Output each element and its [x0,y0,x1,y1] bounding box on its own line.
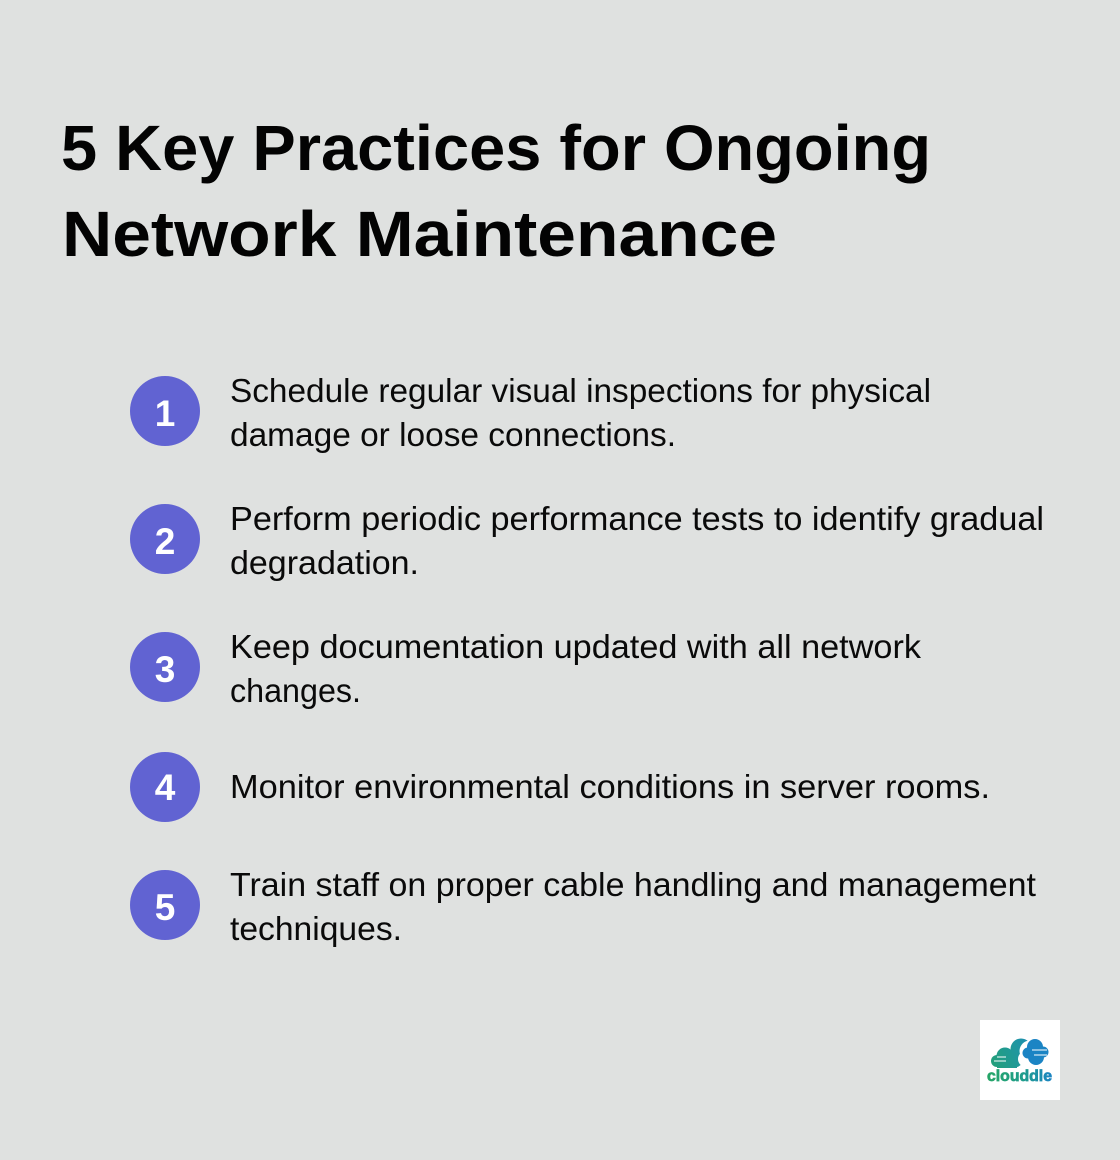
text 3: Keep documentation updated with all network [230,628,922,665]
text 3 [230,628,922,709]
list item 5 [130,866,1036,947]
list item 4 [130,752,990,822]
text 2: Perform periodic performance tests to identify gradual [230,500,1044,537]
badge 1: 1 [155,393,175,434]
text 5: Train staff on proper cable handling and management [230,866,1036,903]
badge 1 [130,376,200,446]
badge 3 [130,632,200,702]
text 4: Monitor environmental conditions in server rooms. [230,768,990,805]
logo: clouddle [980,1020,1060,1100]
text 1 [230,372,931,453]
badge 2 [130,504,200,574]
title [61,112,931,270]
text 1: damage or loose connections. [230,416,676,453]
icon: clouds [991,1038,1048,1068]
text 2 [230,500,1044,581]
text 5: techniques. [230,910,402,947]
badge 2: 2 [155,521,175,562]
text 1: Schedule regular visual inspections for physical [230,372,931,409]
text 3: changes. [230,672,361,709]
list item 1 [130,372,931,453]
text 2: degradation. [230,544,419,581]
title: Network Maintenance [62,198,777,270]
text 5 [230,866,1036,947]
badge 3: 3 [155,649,175,690]
badge 5: 5 [155,887,175,928]
title: 5 Key Practices for Ongoing [61,112,931,184]
badge 5 [130,870,200,940]
badge 4 [130,752,200,822]
logo wordmark: clouddle [987,1068,1052,1085]
list item 3 [130,628,922,709]
badge 4: 4 [155,767,176,808]
list item 2 [130,500,1044,581]
